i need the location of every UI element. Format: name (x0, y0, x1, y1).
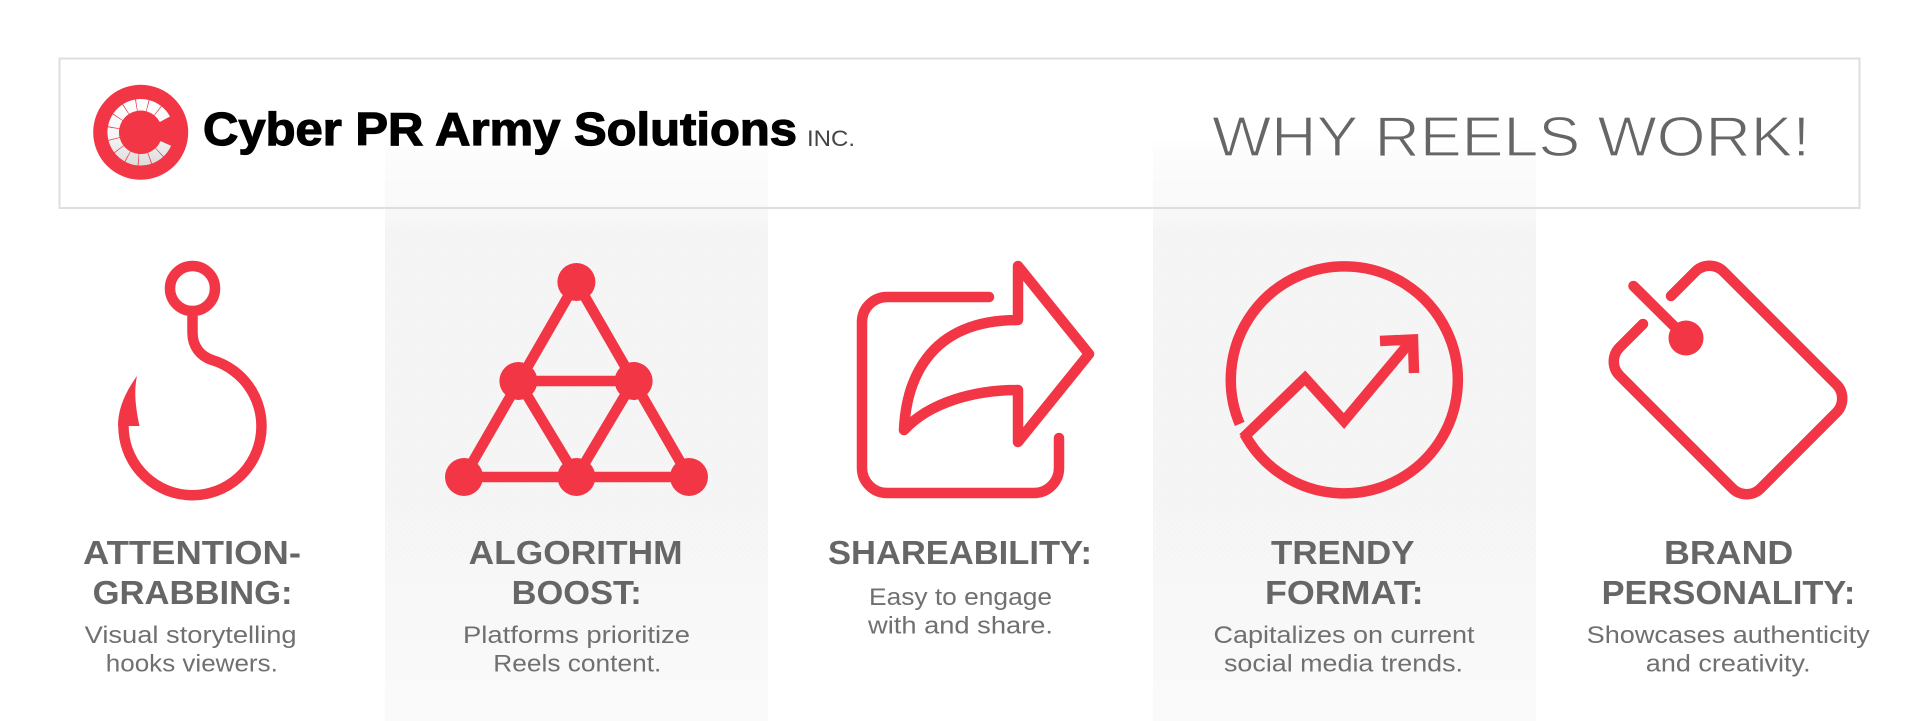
column: algorithm boost: BOOST: (512, 574, 642, 611)
title: WHY REELS WORK! (1212, 105, 1810, 169)
icon: share arrow (862, 266, 1089, 493)
header bar (60, 58, 1860, 208)
panel: algorithm boost background (385, 138, 768, 721)
heading: TRENDY (1271, 534, 1414, 571)
icon: price tag (1614, 266, 1842, 494)
company name: Cyber PR Army Solutions (203, 103, 797, 155)
column: brand personality (1587, 266, 1870, 678)
description: Platforms prioritize (463, 622, 690, 649)
column: brand personality: and creativity. (1646, 650, 1811, 678)
icon: network triangle (445, 263, 708, 496)
description: Capitalizes on current (1214, 622, 1475, 649)
column: trendy format: FORMAT: (1265, 574, 1424, 611)
heading: BRAND (1664, 534, 1793, 571)
company suffix: INC. (807, 126, 855, 151)
column: shareability: with and share. (867, 612, 1053, 640)
icon: fish hook (118, 266, 261, 495)
heading: ALGORITHM (469, 534, 683, 571)
description: Showcases authenticity (1587, 622, 1870, 649)
column: attention-grabbing: GRABBING: (93, 574, 293, 611)
panel: trendy format background (1153, 138, 1536, 721)
column: trendy format: social media trends. (1224, 650, 1463, 678)
heading: SHAREABILITY: (828, 534, 1092, 571)
column: trendy format (1214, 266, 1475, 678)
column: brand personality: PERSONALITY: (1602, 574, 1855, 611)
description: Easy to engage (869, 584, 1052, 611)
heading: ATTENTION- (83, 534, 301, 571)
column: shareability (828, 266, 1092, 640)
description: Visual storytelling (85, 622, 297, 649)
icon: company logo (93, 85, 188, 180)
column: algorithm boost: Reels content. (493, 650, 661, 678)
icon: trend chart in circle (1231, 266, 1458, 493)
column: attention-grabbing (83, 266, 301, 678)
column: algorithm boost (445, 263, 708, 678)
column: attention-grabbing: hooks viewers. (106, 650, 278, 678)
